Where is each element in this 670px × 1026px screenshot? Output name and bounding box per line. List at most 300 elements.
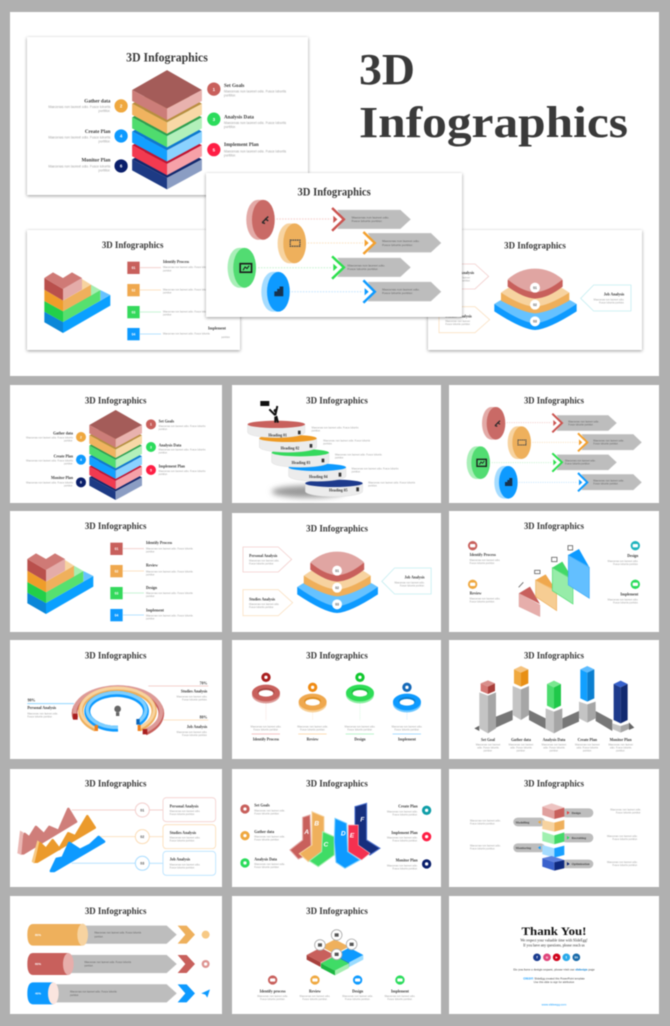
panel blue	[568, 549, 589, 598]
pill labels: Design	[572, 811, 581, 815]
labels: Maecenas non laoreet odio. Fusce lobortis	[159, 425, 205, 428]
body text: Maecenas non laoreet odio.	[607, 861, 638, 864]
arrow text	[565, 420, 624, 485]
letter C	[309, 832, 334, 867]
labels: Maecenas non laoreet odio. Fusce lobortis	[159, 470, 205, 473]
heading labels	[268, 433, 348, 493]
ring labels: Fusce lobortis porttitor.	[300, 729, 326, 732]
thumbnail: isometric tiles	[232, 896, 441, 1014]
cube green	[542, 832, 564, 844]
labels: Identify Process	[470, 553, 496, 557]
title: 3D Infographics	[85, 780, 147, 790]
ring labels: Maecenas non laoreet odio.	[392, 726, 422, 729]
labels: 80%	[200, 715, 207, 719]
labels: Maecenas non laoreet odio. Fusce lobortis	[163, 333, 210, 336]
labels: Create Plan	[398, 805, 418, 809]
labels: Fusce lobortis porttitor.	[445, 280, 471, 283]
numbers and labels: porttitor.	[224, 125, 236, 129]
labels: Review	[146, 564, 158, 568]
heading labels: Heading 05	[329, 489, 348, 493]
disk 5	[305, 480, 363, 497]
labels: Fusce lobortis porttitor.	[613, 602, 639, 605]
arrow text: Fusce lobortis porttitor.	[382, 291, 413, 295]
column labels: Gather data	[511, 738, 531, 742]
labels: Fusce lobortis porttitor.	[249, 563, 274, 566]
website: www.slideegg.com	[542, 1002, 567, 1006]
body text: Maecenas non laoreet odio.	[607, 835, 638, 838]
arcs content	[27, 651, 208, 737]
arrow text: Fusce lobortis porttitor.	[565, 463, 590, 466]
thumbnail: pyramid	[232, 513, 441, 632]
disk icons	[298, 431, 359, 491]
labels: porttitor.	[159, 428, 168, 431]
cubes content	[470, 780, 641, 871]
column labels: Monitor Plan	[610, 738, 632, 742]
column 1	[479, 680, 496, 733]
ring labels: Implement	[398, 737, 417, 741]
labels: Implement	[620, 593, 639, 597]
letter glyphs: B	[314, 821, 319, 828]
circles	[240, 804, 431, 869]
thumbnail: stepped disks	[232, 385, 441, 503]
letter glyphs: F	[360, 817, 365, 824]
panel orange	[536, 574, 557, 611]
labels: 1	[150, 423, 152, 427]
title: 3D Infographics	[306, 907, 368, 917]
numbers and labels: 2	[120, 104, 123, 109]
labels: Review	[470, 592, 482, 596]
arrow text: Fusce lobortis porttitor.	[382, 243, 413, 247]
column labels: porttitor.	[516, 750, 526, 753]
labels: Personal Analysis	[27, 706, 57, 710]
labels	[26, 420, 206, 487]
body text: porttitor.	[335, 457, 344, 460]
arrow text: Fusce lobortis porttitor.	[348, 267, 379, 271]
arrow text: Maecenas non laoreet odio. Fusce lobortis	[84, 961, 131, 964]
labels: Maecenas non laoreet odio.	[608, 599, 638, 602]
pyramid graphic	[243, 547, 431, 616]
labels: Fusce lobortis porttitor.	[345, 998, 371, 1001]
title: 3D Infographics	[306, 396, 368, 406]
title: 3D Infographics	[85, 651, 147, 661]
labels: 5	[150, 468, 152, 472]
labels: Maecenas non laoreet odio.	[254, 809, 285, 812]
labels: Design	[627, 554, 639, 558]
orange arc	[81, 688, 154, 729]
drop lines	[266, 703, 407, 720]
column 5	[612, 681, 629, 733]
labels: Analysis Data	[254, 857, 277, 861]
numbers and labels: 3	[213, 117, 216, 122]
labels: Maecenas non laoreet odio.	[254, 836, 285, 839]
labels: Maecenas non laoreet odio. Fusce lobortis	[26, 437, 73, 440]
labels: Fusce lobortis porttitor.	[182, 699, 208, 702]
labels: Maecenas non laoreet odio. Fusce lobortis	[163, 310, 210, 313]
hero slide: pyramid	[428, 230, 642, 350]
numbered circles	[135, 803, 149, 870]
panel maroon	[519, 587, 540, 617]
labels: Maecenas non laoreet odio. Fusce lobortis	[159, 449, 205, 452]
cube blue	[542, 845, 564, 858]
arrow text: Maecenas non laoreet odio.	[593, 440, 624, 443]
labels	[27, 682, 208, 737]
pin icons	[318, 933, 354, 956]
labels: Maecenas non laoreet odio. Fusce lobortis	[146, 548, 193, 551]
labels: Maecenas non laoreet odio.	[385, 995, 415, 998]
blue arc	[87, 693, 146, 729]
numbers and labels: porttitor.	[99, 140, 111, 144]
thumbnail: staircase	[10, 511, 222, 632]
circle numbers: 01	[140, 808, 144, 812]
arrow text: Fusce lobortis porttitor.	[593, 482, 619, 485]
labels: Maecenas non laoreet odio.	[249, 603, 279, 606]
box text: Personal Analysis	[170, 804, 199, 808]
labels: Design	[146, 586, 158, 590]
labels: porttitor.	[163, 269, 172, 272]
blue tile	[335, 948, 363, 967]
arrow text: Maecenas non laoreet odio.	[348, 264, 385, 268]
body text: Maecenas non laoreet odio. Fusce lobortis	[323, 440, 370, 443]
staircase content	[27, 522, 194, 621]
labels: Analysis Data	[159, 443, 181, 447]
body text: porttitor.	[312, 429, 321, 432]
disks content	[248, 396, 416, 498]
labels: Fusce lobortis porttitor.	[249, 606, 274, 609]
labels: Maecenas non laoreet odio.	[249, 560, 279, 563]
column labels: Create Plan	[578, 738, 598, 742]
arrow text: Fusce lobortis porttitor.	[568, 423, 594, 426]
labels	[257, 989, 416, 1001]
labels: Maecenas non laoreet odio.	[387, 810, 418, 813]
labels: 90%	[28, 698, 35, 702]
labels: Fusce lobortis porttitor.	[260, 998, 286, 1001]
panels content	[468, 522, 640, 617]
labels: porttitor.	[146, 617, 155, 620]
body text: Maecenas non laoreet odio.	[470, 844, 501, 847]
mountains content	[17, 780, 216, 875]
floor walls	[474, 710, 634, 731]
labels: Maecenas non laoreet odio.	[177, 696, 207, 699]
labels: porttitor.	[159, 473, 168, 476]
ring green	[346, 673, 374, 703]
column labels: Maecenas non laoreet	[476, 744, 500, 747]
body text	[470, 809, 641, 867]
title: 3D Infographics	[85, 522, 147, 532]
numbers and labels: 4	[120, 134, 123, 139]
heading labels: Heading 04	[309, 475, 328, 479]
staircase graphic	[27, 543, 144, 621]
labels	[445, 271, 625, 326]
ring labels: Maecenas non laoreet odio.	[251, 726, 281, 729]
labels: Studies Analysis	[181, 690, 208, 694]
labels: Maecenas non laoreet odio.	[177, 731, 207, 734]
labels: Set Goals	[159, 420, 175, 424]
labels: Review	[309, 989, 321, 993]
numbers and labels: 5	[213, 147, 216, 152]
numbers and labels: porttitor.	[99, 168, 111, 172]
stack content	[48, 50, 286, 189]
ring labels: Fusce lobortis porttitor.	[347, 729, 373, 732]
box text: Fusce lobortis porttitor.	[170, 840, 195, 843]
hero heading: 3D	[359, 45, 415, 94]
box text	[170, 804, 201, 869]
labels: Personal Analysis	[445, 271, 475, 275]
labels: Fusce lobortis porttitor.	[254, 866, 280, 869]
box text: Maecenas non laoreet odio.	[170, 863, 200, 866]
labels: Implement	[391, 989, 410, 993]
letter D	[334, 818, 360, 868]
arrow text: Maecenas non laoreet odio.	[593, 479, 624, 482]
numbers and labels: Monitor Plan	[81, 158, 111, 164]
figure with flag	[260, 401, 278, 423]
labels: Maecenas non laoreet odio.	[594, 298, 624, 301]
boxes	[163, 798, 216, 875]
numbers and labels: Maecenas non laoreet odio. Fusce lobortis	[224, 90, 286, 94]
arrow text: porttitor.	[84, 965, 94, 968]
column labels: odio. Fusce lobortis	[577, 747, 599, 750]
box text: Fusce lobortis porttitor.	[170, 813, 195, 816]
maroon arc	[75, 687, 161, 733]
ring labels	[251, 726, 423, 741]
arrow text: Maecenas non laoreet odio.	[568, 420, 599, 423]
ring blue	[393, 683, 421, 712]
labels: Maecenas non laoreet odio.	[300, 995, 330, 998]
numbers and labels: Maecenas non laoreet odio. Fusce lobortis	[224, 149, 286, 153]
connectors	[72, 810, 163, 863]
hero slide: staircase	[27, 230, 240, 350]
labels: Job Analysis	[604, 293, 625, 297]
orange tile	[321, 939, 349, 954]
title: 3D Infographics	[126, 50, 208, 64]
design request line: Do you have a design request, please visit our slidesign page	[513, 968, 595, 973]
title: 3D Infographics	[85, 396, 147, 406]
arrow text: Maecenas non laoreet odio.	[352, 216, 389, 220]
social icons: t	[566, 955, 568, 960]
numbers and labels: Maecenas non laoreet odio. Fusce lobortis	[224, 121, 286, 125]
numbers and labels: porttitor.	[224, 94, 236, 98]
labels: Fusce lobortis porttitor.	[445, 323, 471, 326]
letter F	[355, 803, 380, 855]
orange cylinder	[27, 924, 88, 946]
thumbnail: column chart	[449, 640, 659, 759]
labels	[163, 260, 231, 339]
column labels: porttitor.	[483, 750, 493, 753]
labels: Identify Process	[146, 541, 173, 545]
orange mountain	[32, 816, 95, 864]
body text: Maecenas non laoreet odio. Fusce lobortis	[312, 426, 358, 429]
labels: Monitor Plan	[396, 859, 418, 863]
numbers and labels: porttitor.	[99, 109, 111, 113]
thank you content	[513, 926, 595, 1006]
labels: Identify process	[260, 989, 286, 993]
title: 3D Infographics	[306, 780, 368, 790]
column labels: Maecenas non laoreet	[575, 744, 600, 747]
pill labels: Monitoring	[516, 846, 532, 850]
pill labels: Modelling	[516, 820, 530, 824]
labels: Monitor Plan	[51, 476, 74, 480]
column labels	[476, 738, 633, 753]
letter B	[299, 812, 324, 862]
pill markers	[538, 811, 570, 866]
labels: Fusce lobortis porttitor.	[470, 601, 495, 604]
labels: Studies Analysis	[249, 597, 276, 601]
box text: Studies Analysis	[170, 831, 197, 835]
columns content	[474, 651, 634, 753]
letter glyphs: E	[350, 833, 355, 840]
box text: Fusce lobortis porttitor.	[170, 866, 195, 869]
labels: porttitor.	[64, 484, 73, 487]
floor shadow	[272, 486, 345, 498]
ring labels: Fusce lobortis porttitor.	[394, 729, 420, 732]
percentages: 80%	[35, 933, 41, 937]
stack content	[26, 396, 206, 500]
heading labels: Heading 01	[268, 433, 287, 437]
letters content	[240, 780, 431, 870]
thumbnail: layered stack	[10, 385, 222, 503]
body text: porttitor.	[323, 443, 333, 446]
hero slide: disks and arrows	[206, 173, 462, 317]
arrow text: Maecenas non laoreet odio. Fusce lobortis	[70, 990, 117, 993]
labels: Implement	[208, 327, 227, 331]
ring labels: Identify Process	[253, 737, 280, 741]
labels: Implement Plan	[391, 831, 418, 835]
labels: Implement Plan	[159, 464, 186, 468]
labels: Job Analysis	[405, 576, 425, 580]
labels: Fusce lobortis porttitor.	[392, 813, 418, 816]
column labels: Maecenas non laoreet	[509, 744, 533, 747]
chevrons	[178, 926, 195, 1002]
numbers and labels: Maecenas non laoreet odio. Fusce lobortis	[48, 164, 110, 168]
title: 3D Infographics	[85, 907, 147, 917]
staircase content	[44, 241, 231, 340]
ring labels: Maecenas non laoreet odio.	[297, 726, 328, 729]
labels: Maecenas non laoreet odio.	[342, 995, 373, 998]
arrow text: Maecenas non laoreet odio. Fusce lobortis	[94, 932, 141, 935]
numbers and labels: Analysis Data	[224, 114, 254, 120]
blue mountain	[51, 837, 104, 871]
pill labels: Optimization	[572, 862, 590, 866]
column labels: odio. Fusce lobortis	[477, 747, 500, 750]
ring labels: Design	[354, 737, 366, 741]
numbers and labels: 6	[120, 164, 123, 169]
column labels: Maecenas non laoreet	[608, 744, 633, 747]
connector lines	[27, 686, 208, 720]
thumbnail: cylinder arrows	[10, 896, 222, 1014]
column 2	[513, 666, 529, 720]
social icons: ▸	[555, 955, 559, 960]
title: 3D Infographics	[524, 651, 584, 661]
title: 3D Infographics	[306, 524, 368, 534]
labels	[254, 804, 418, 870]
ring labels: Review	[307, 737, 319, 741]
labels: Gather data	[254, 830, 274, 834]
percentages: 40%	[35, 991, 41, 995]
body text: Maecenas non laoreet odio. Fusce lobortis	[352, 468, 398, 471]
labels: Fusce lobortis porttitor.	[599, 301, 625, 304]
rings content	[251, 651, 423, 741]
labels: porttitor.	[146, 573, 155, 576]
box text: Maecenas non laoreet odio.	[170, 810, 200, 813]
labels: Fusce lobortis porttitor.	[392, 867, 418, 870]
arrow text: porttitor.	[94, 935, 104, 938]
labels: 3	[150, 445, 152, 449]
heading: Thank You!	[521, 926, 586, 938]
cube orange	[542, 820, 564, 832]
arrow text	[70, 932, 142, 997]
disks and arrows graphic	[228, 200, 441, 312]
title: 3D Infographics	[524, 396, 584, 406]
thumbnail: mountain area charts	[10, 769, 222, 887]
body text: Fusce lobortis porttitor.	[470, 822, 495, 825]
title: 3D Infographics	[298, 185, 371, 198]
percentages: 60%	[35, 962, 41, 966]
body text: porttitor.	[368, 485, 378, 488]
title: 3D Infographics	[504, 241, 566, 251]
labels: Maecenas non laoreet odio. Fusce lobortis	[146, 614, 193, 617]
numbers and labels: Create Plan	[85, 129, 111, 135]
credit: Use this slide to sign for attribution	[534, 980, 575, 984]
numbers and labels: Implement Plan	[224, 142, 259, 148]
circles	[268, 975, 405, 985]
numbers and labels: Maecenas non laoreet odio. Fusce lobortis	[48, 136, 110, 140]
column labels: porttitor.	[549, 750, 559, 753]
labels: Maecenas non laoreet odio.	[394, 581, 425, 584]
staircase graphic	[44, 262, 161, 340]
labels: Design	[352, 989, 364, 993]
labels: 2	[80, 435, 82, 439]
circle numbers: 03	[140, 862, 144, 866]
labels: Maecenas non laoreet odio.	[470, 559, 500, 562]
cylinders content	[27, 907, 210, 1004]
labels: Maecenas non laoreet odio.	[257, 995, 288, 998]
disk 1	[248, 421, 305, 438]
labels: Studies Analysis	[445, 314, 472, 318]
credit: CREDIT: SlideEgg created this PowerPoint template	[523, 978, 585, 981]
subtext: We respect your valuable time with SlideEgg!	[520, 939, 588, 943]
labels: porttitor.	[159, 452, 168, 455]
letter A	[290, 815, 311, 859]
body text: Maecenas non laoreet odio. Fusce lobortis	[335, 454, 382, 457]
icon: light bulb	[114, 706, 121, 716]
column labels: odio. Fusce lobortis	[543, 747, 566, 750]
thumbnail: thank you	[449, 896, 659, 1014]
blue cylinder	[27, 982, 59, 1004]
column labels: Maecenas non laoreet	[542, 744, 566, 747]
labels: 6	[80, 481, 82, 485]
title: 3D Infographics	[524, 522, 584, 532]
title: 3D Infographics	[102, 241, 164, 251]
disks and arrows graphic	[467, 407, 642, 499]
labels: Create Plan	[54, 454, 74, 458]
thumbnail: concentric arcs	[10, 640, 222, 759]
disk 3	[272, 449, 329, 467]
body text: Maecenas non laoreet odio.	[610, 809, 641, 812]
arrow text: Maecenas non laoreet odio.	[382, 288, 420, 292]
arrow text	[348, 216, 420, 295]
labels: porttitor.	[64, 463, 73, 466]
letter glyphs	[303, 817, 365, 849]
labels: 70%	[200, 682, 207, 686]
column labels: Analysis Data	[543, 738, 565, 742]
labels: Implement	[146, 608, 165, 612]
labels: 4	[80, 458, 82, 462]
labels: porttitor.	[146, 595, 155, 598]
panel icons	[519, 546, 573, 587]
letter E	[348, 825, 370, 860]
labels: porttitor.	[64, 440, 73, 443]
arrow text: Maecenas non laoreet odio.	[565, 460, 596, 463]
social icons: o	[546, 955, 549, 960]
